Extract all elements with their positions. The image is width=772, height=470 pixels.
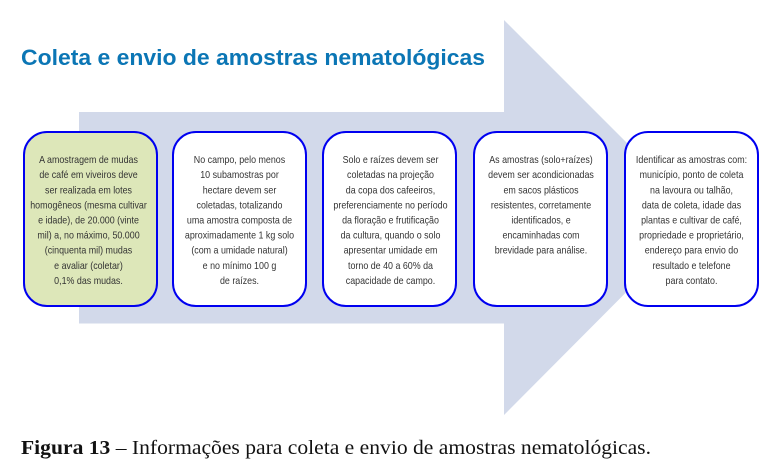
panel: step 1 sampling in nurseries: 0,1% das mudas. — [54, 276, 123, 287]
panel: step 2 field subsamples — [173, 132, 306, 306]
panel: step 3 soil and roots: da floração e frutificação — [342, 215, 439, 227]
panel: step 5 sample identification: na lavoura ou talhão, — [650, 185, 733, 197]
panel: step 5 sample identification: Identificar as amostras com: — [636, 155, 747, 166]
panel: step 4 packing samples: em sacos plásticos — [503, 185, 579, 197]
caption: Figura 13 – Informações para coleta e envio de amostras nematológicas. — [21, 437, 651, 459]
panel: step 1 sampling in nurseries: (cinquenta mil) mudas — [45, 245, 132, 257]
panel: step 4 packing samples — [474, 132, 607, 306]
panel: step 4 packing samples: encaminhadas com — [502, 230, 580, 242]
panel: step 1 sampling in nurseries: e avaliar (coletar) — [54, 261, 123, 272]
panel: step 1 sampling in nurseries — [24, 132, 157, 306]
panel: step 2 field subsamples: coletadas, totalizando — [197, 200, 282, 212]
panel: step 3 soil and roots: coletadas na projeção — [347, 170, 434, 181]
panel: step 2 field subsamples: uma amostra composta de — [187, 215, 292, 227]
panel: step 4 packing samples: resistentes, corretamente — [491, 200, 591, 212]
panel: step 2 field subsamples: No campo, pelo menos — [194, 155, 285, 166]
panel: step 1 sampling in nurseries: ser realizada em lotes — [45, 185, 132, 197]
panel: step 5 sample identification: data de coleta, idade das — [642, 200, 741, 212]
panel: step 3 soil and roots: Solo e raízes devem ser — [343, 155, 438, 166]
panel: step 2 field subsamples: e no mínimo 100 g — [203, 261, 276, 272]
panel: step 3 soil and roots: torno de 40 a 60% da — [348, 261, 434, 272]
panel: step 3 soil and roots: da cultura, quando o solo — [341, 230, 440, 242]
panel: step 1 sampling in nurseries: e idade), de 20.000 (vinte — [38, 215, 139, 227]
panel: step 4 packing samples: identificados, e — [511, 215, 571, 227]
panel: step 2 field subsamples: de raízes. — [220, 276, 259, 287]
panel: step 5 sample identification: plantas e cultivar de café, — [641, 215, 742, 227]
panel: step 5 sample identification: resultado e telefone — [652, 261, 731, 272]
panel: step 5 sample identification: município, ponto de coleta — [640, 170, 744, 181]
panel: step 1 sampling in nurseries: homogêneos (mesma cultivar — [30, 200, 147, 212]
panel: step 4 packing samples: As amostras (solo+raízes) — [489, 155, 593, 166]
panel: step 2 field subsamples: aproximadamente 1 kg solo — [185, 230, 294, 242]
panel: step 1 sampling in nurseries: mil) a, no máximo, 50.000 — [37, 230, 140, 242]
panel: step 3 soil and roots: capacidade de campo. — [346, 276, 435, 287]
panel: step 3 soil and roots: apresentar umidade em — [344, 245, 438, 257]
panel: step 2 field subsamples: 10 subamostras por — [200, 170, 279, 181]
panel: step 2 field subsamples: (com a umidade natural) — [191, 245, 288, 257]
panel: step 2 field subsamples: hectare devem ser — [203, 185, 276, 197]
panel: step 1 sampling in nurseries: A amostragem de mudas — [39, 155, 138, 166]
panel: step 5 sample identification: propriedade e proprietário, — [639, 230, 744, 242]
panel: step 3 soil and roots: da copa dos cafeeiros, — [346, 185, 435, 197]
arrow: background process arrow — [79, 20, 701, 415]
panel: step 1 sampling in nurseries: de café em viveiros deve — [39, 170, 138, 181]
panel: step 4 packing samples: brevidade para análise. — [495, 245, 587, 257]
panel: step 4 packing samples: devem ser acondicionadas — [488, 170, 594, 181]
panel: step 3 soil and roots — [323, 132, 456, 306]
panel: step 3 soil and roots: preferenciamente no período — [333, 200, 448, 212]
panel: step 5 sample identification — [625, 132, 758, 306]
title: Coleta e envio de amostras nematológicas — [21, 45, 485, 70]
panel: step 5 sample identification: endereço para envio do — [645, 245, 738, 257]
panel: step 5 sample identification: para contato. — [666, 276, 717, 287]
